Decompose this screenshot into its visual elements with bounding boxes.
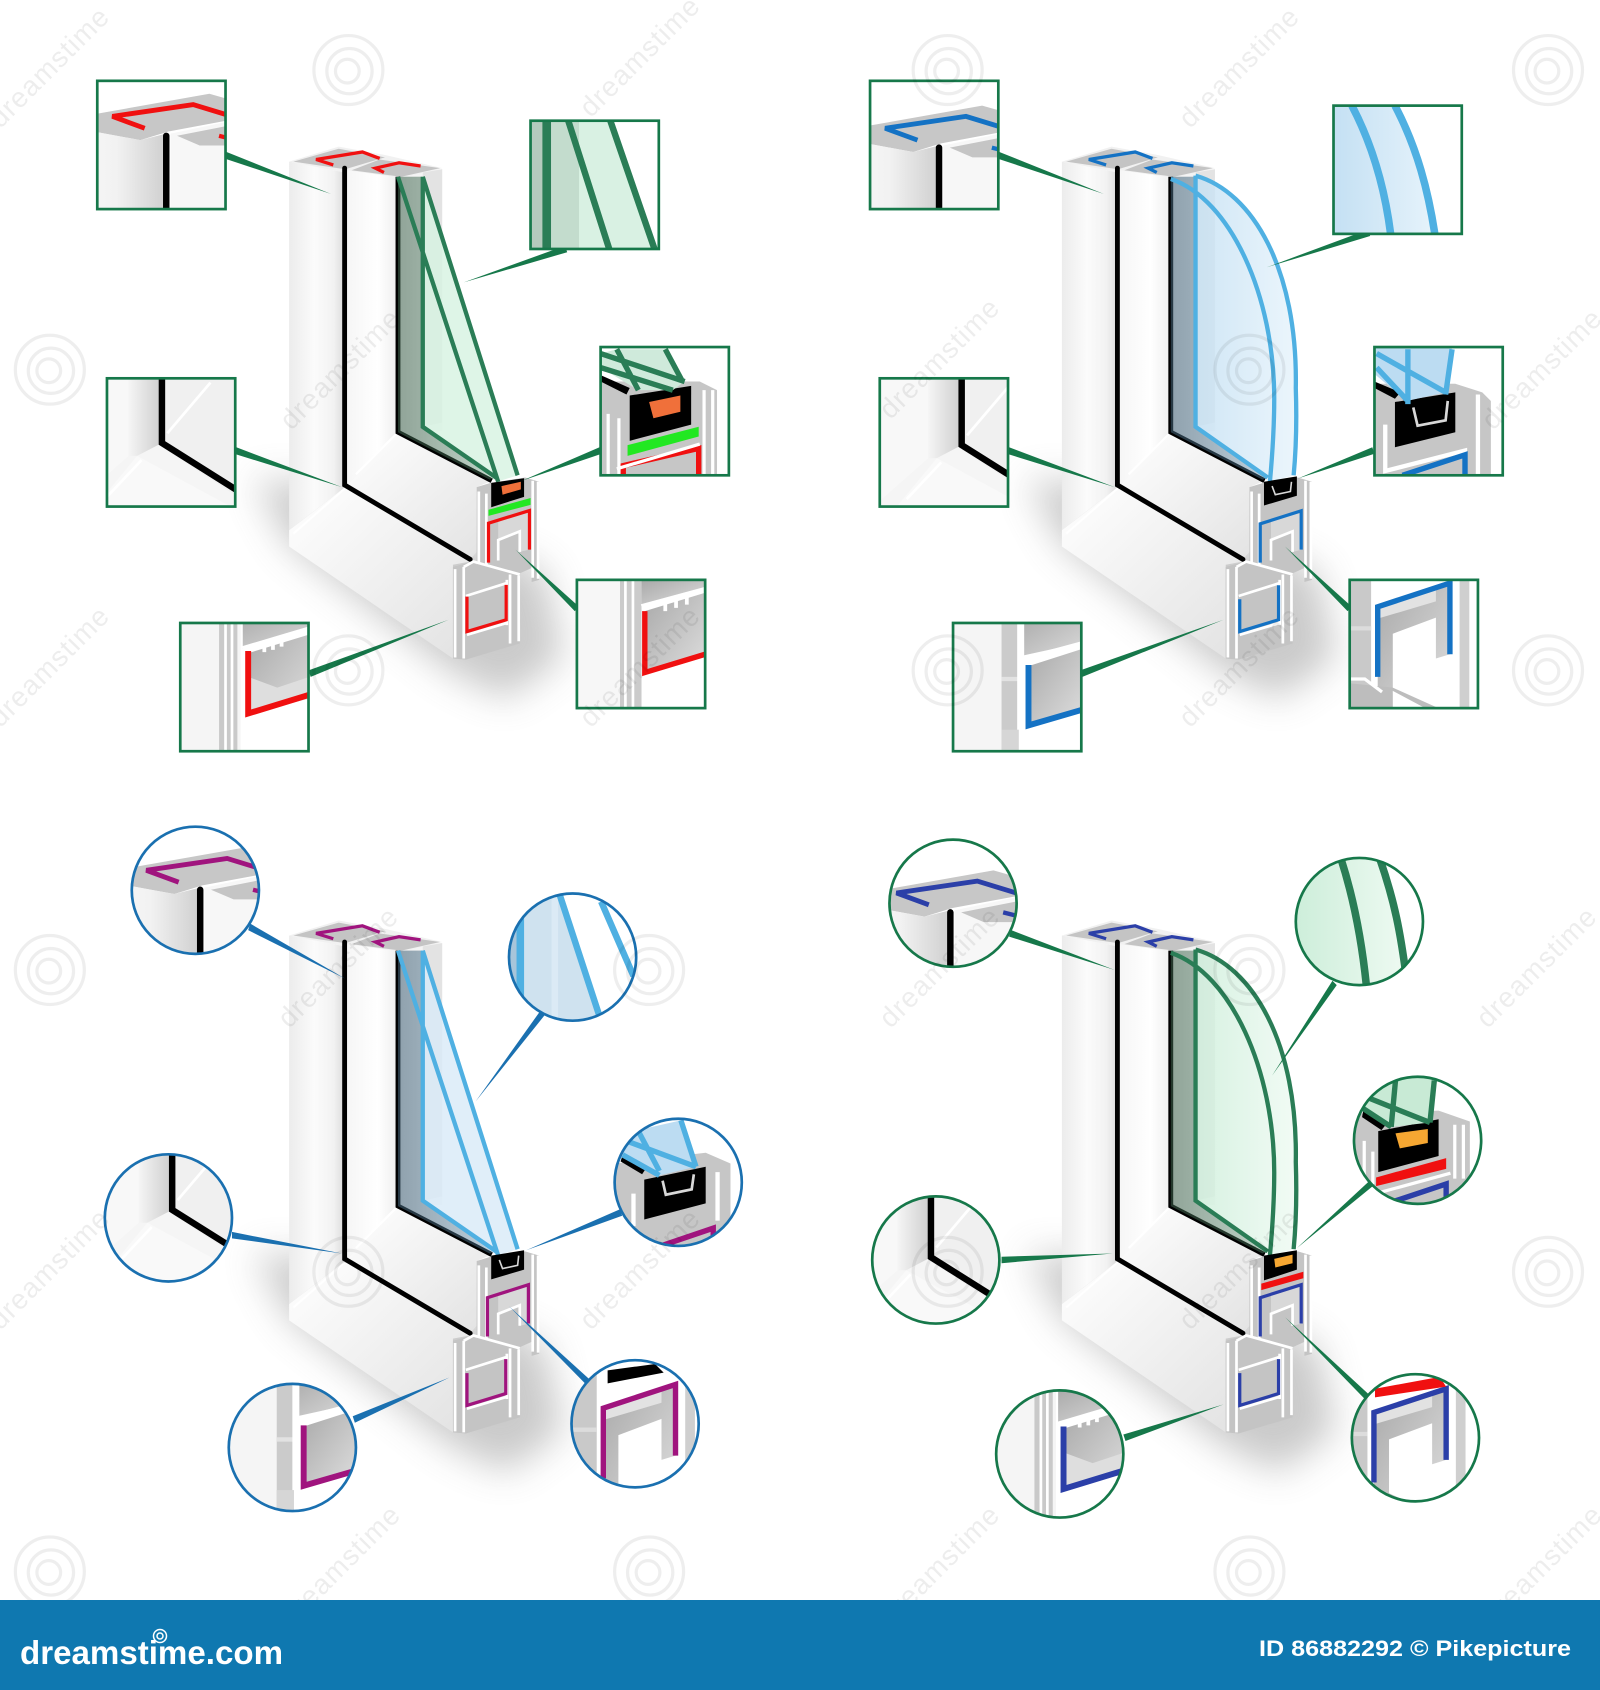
callout: corner seam (870, 1195, 1001, 1325)
callout: sill chamber (994, 1389, 1125, 1519)
callout: glazing bead (601, 347, 729, 475)
panel: magenta profile with blue triangular glass and round callouts (74, 813, 742, 1554)
section core (467, 1250, 528, 1405)
section core (1240, 1250, 1303, 1405)
callout: glazing bead (614, 1118, 742, 1246)
callout: sill chamber (952, 622, 1083, 753)
callout: corner seam (106, 376, 237, 508)
leader lines (1002, 930, 1373, 1441)
callout: frame chamber (577, 580, 705, 708)
section core (467, 478, 531, 632)
window profile 3 (255, 920, 563, 1472)
curved blue glass (1171, 176, 1296, 482)
callout: sill chamber (178, 622, 310, 753)
leader lines (232, 924, 622, 1423)
callout: frame top (888, 838, 1018, 968)
callout: curved glass (1295, 857, 1424, 986)
watermark text: dreamstime (1470, 901, 1600, 1034)
callout: frame chamber (570, 1358, 700, 1489)
watermark text: dreamstime (1172, 1202, 1306, 1335)
watermark text: dreamstime (873, 1499, 1006, 1632)
top cuts (1089, 152, 1193, 172)
panel: navy profile with curved green glass and round callouts (833, 836, 1508, 1558)
watermark text: dreamstime (1172, 600, 1306, 733)
window profile 1 (255, 147, 563, 698)
callout: frame top (96, 80, 227, 210)
logo spiral (154, 1630, 166, 1642)
blue triangular glass (398, 951, 518, 1256)
top cuts (316, 926, 421, 946)
section core (1240, 476, 1301, 632)
window profile 4 (1027, 920, 1336, 1472)
watermark text: dreamstime (873, 292, 1006, 425)
callout: glass (508, 893, 637, 1021)
green glass unit (398, 177, 518, 482)
logo text: dreamstime.com (20, 1634, 283, 1671)
callout: corner seam (878, 376, 1010, 508)
leader lines (997, 152, 1374, 677)
footer bar (0, 1600, 1600, 1690)
callout: frame chamber (1348, 578, 1480, 710)
callout: glazing bead (1353, 1076, 1482, 1204)
callout: sill chamber (227, 1382, 358, 1512)
callout: frame top (130, 825, 260, 956)
callout: frame top (868, 80, 1000, 210)
top cuts (316, 152, 421, 172)
watermark text: dreamstime (274, 1499, 407, 1632)
callout: corner seam (103, 1153, 234, 1283)
panel: blue profile with curved blue glass and square callouts (849, 71, 1511, 774)
top cuts (1089, 926, 1193, 946)
window profile 2 (1027, 147, 1336, 698)
callout: curved glass (1334, 106, 1462, 234)
image id and credit: ID 86882292 © Pikepicture (1259, 1636, 1571, 1661)
panel: red profile with green triangular glass and square callouts (64, 59, 729, 774)
leader lines (224, 152, 602, 677)
watermark text: dreamstime (274, 302, 407, 435)
watermark text: dreamstime (573, 1202, 706, 1335)
callout: glass (531, 121, 659, 249)
watermark text: dreamstime (271, 901, 404, 1034)
callout: glazing bead (1374, 347, 1503, 475)
callout: frame chamber (1350, 1372, 1480, 1503)
curved green glass (1171, 950, 1296, 1256)
watermark text: dreamstime (573, 600, 706, 733)
watermark text: dreamstime (1172, 1, 1306, 134)
watermark text: dreamstime (873, 901, 1006, 1034)
